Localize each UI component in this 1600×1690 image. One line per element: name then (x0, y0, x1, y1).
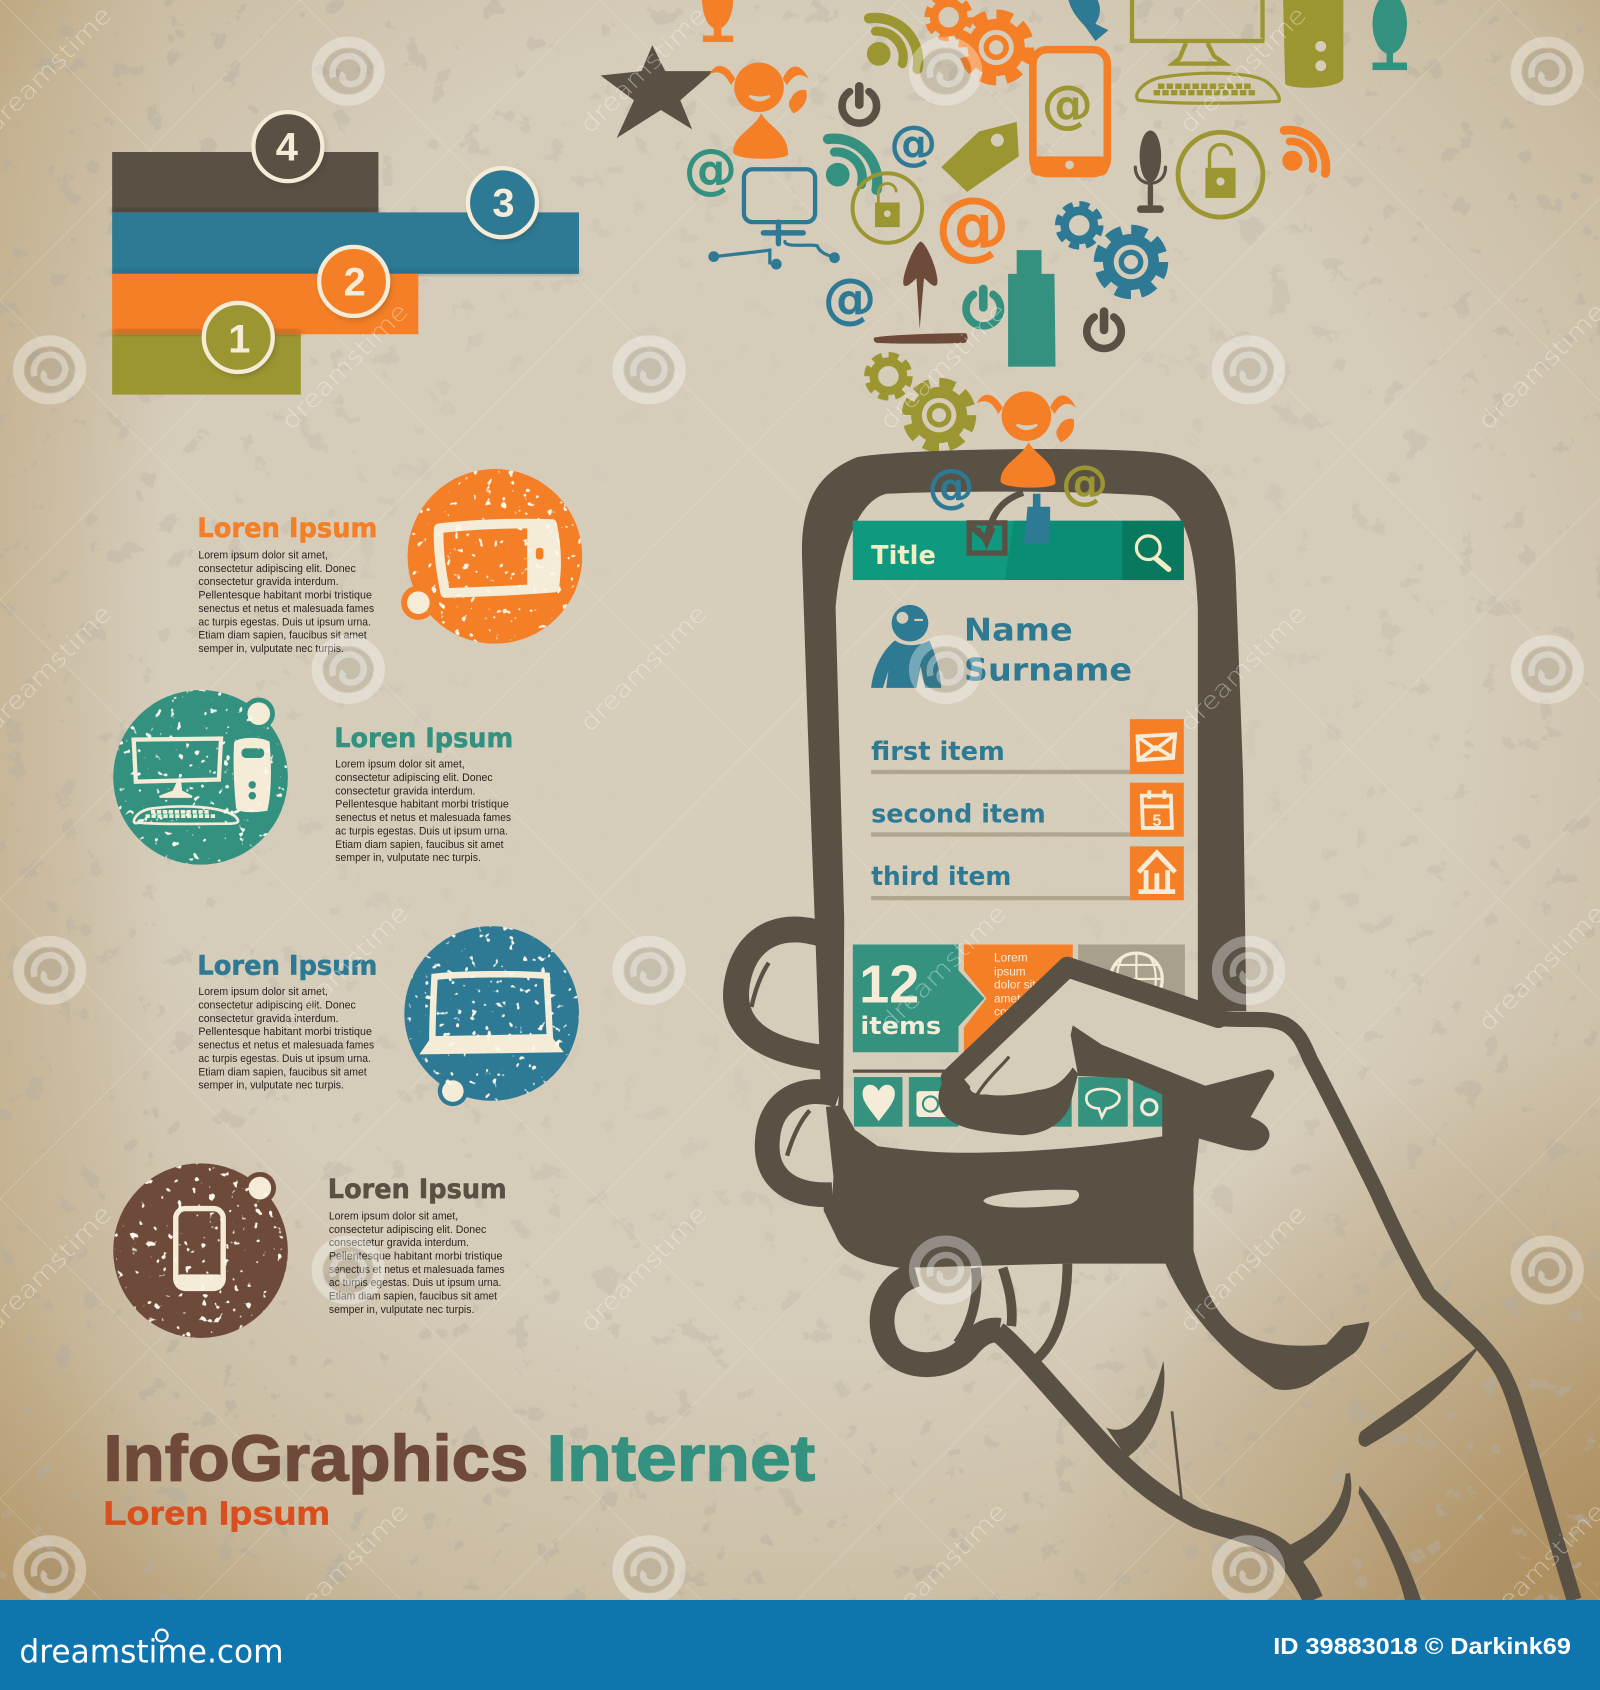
watermark text: dreamstime (574, 1, 712, 139)
thumb underside (938, 1067, 1078, 1135)
title: Internet (547, 1421, 815, 1494)
watermark text: dreamstime (574, 1200, 712, 1338)
icon: power teal (966, 289, 1001, 326)
body text: Lorem ipsum dolor sit amet, (198, 986, 328, 998)
watermark text: dreamstime (1174, 1, 1312, 139)
floating internet icons (601, 0, 1407, 446)
icon: girl bottom (977, 391, 1076, 488)
icon: desktop circle (110, 687, 291, 868)
hand palm cover (949, 958, 1283, 1121)
icon: at teal: @ (684, 138, 737, 201)
ring finger (882, 1274, 999, 1365)
watermark text: dreamstime (1473, 297, 1600, 435)
body text: Etiam diam sapien, faucibus sit amet (198, 630, 367, 642)
icon: laptop circle (401, 923, 582, 1106)
ribbon bar 2 (112, 274, 418, 334)
body text (329, 1210, 505, 1316)
badge 4 (253, 112, 325, 184)
phone bottom and palm mass (824, 1025, 1274, 1268)
icon: teal microphone (1372, 0, 1407, 70)
icon: microphone dark (1135, 130, 1165, 209)
title (104, 1421, 815, 1533)
badge 4: 4 (276, 126, 298, 170)
icon: at blue: @ (889, 116, 937, 172)
tile: 12 items (853, 944, 984, 1052)
icon: olive gears (868, 356, 970, 446)
tile: orange lorem: con (994, 1005, 1013, 1019)
wrist crease (1358, 1342, 1482, 1447)
badge 2: 2 (344, 260, 366, 304)
icon: rss orange (1282, 130, 1326, 174)
body text: semper in, vulputate nec turpis. (335, 852, 481, 864)
watermark text: dreamstime (276, 1497, 414, 1635)
badge 3: 3 (492, 182, 515, 226)
watermark text: dreamstime (276, 297, 414, 435)
icon: orange gears (928, 0, 1028, 79)
body text: ac turpis egestas. Duis ut ipsum urna. (335, 825, 508, 837)
third item row (871, 846, 1184, 900)
body text: Etiam diam sapien, faucibus sit amet (335, 839, 504, 851)
watermark text: dreamstime (276, 899, 414, 1037)
body text: Pellentesque habitant morbi tristique (198, 1026, 372, 1038)
heading: Loren Ipsum (197, 513, 377, 544)
tile: globe (1078, 944, 1185, 1009)
body text: Pellentesque habitant morbi tristique (329, 1250, 502, 1262)
body text: consectetur adipiscing elit. Donec (335, 772, 493, 784)
badge 1 (204, 303, 275, 375)
body text: consectetur gravida interdum. (335, 785, 475, 797)
palm lower edge (997, 1332, 1313, 1600)
body text: semper in, vulputate nec turpis. (198, 1080, 344, 1092)
profile icon (871, 605, 941, 688)
body text: senectus et netus et malesuada fames (335, 812, 511, 824)
body text: ac turpis egestas. Duis ut ipsum urna. (198, 1053, 371, 1065)
ribbon bar 3 (112, 212, 579, 274)
body text: consectetur adipiscing elit. Donec (198, 1000, 356, 1012)
phone in hand (736, 391, 1574, 1600)
body text (198, 549, 375, 655)
body text: senectus et netus et malesuada fames (198, 1040, 375, 1052)
heading: Loren Ipsum (197, 951, 377, 982)
panel: tablet item (197, 466, 585, 655)
body text (198, 986, 375, 1092)
icon: desktop computer olive (1132, 0, 1343, 103)
second item row: 5 (1152, 812, 1161, 830)
profile name: Name (964, 612, 1073, 648)
lower wrist curve (1358, 1486, 1421, 1600)
icon: smartphone circle (110, 1160, 291, 1341)
title: InfoGraphics (104, 1421, 528, 1494)
badge 3 (468, 168, 539, 240)
icon: star (601, 45, 714, 138)
body text: ac turpis egestas. Duis ut ipsum urna. (329, 1277, 501, 1289)
watermark text: dreamstime (1473, 899, 1600, 1037)
badge 1: 1 (228, 318, 250, 362)
profile name: Surname (964, 652, 1132, 688)
index finger (736, 929, 832, 1059)
watermark text: dreamstime (874, 1497, 1012, 1635)
thumb base crease (1165, 1251, 1369, 1390)
ring finger inner lines (957, 1264, 1067, 1358)
tile separator (853, 1070, 1183, 1073)
badge 2 (319, 247, 390, 319)
footer logo: dreamstime.com (19, 1633, 284, 1671)
body text: ac turpis egestas. Duis ut ipsum urna. (198, 616, 371, 628)
body text (335, 759, 511, 864)
icon: blue monitor network (711, 169, 838, 267)
body text: senectus et netus et malesuada fames (329, 1264, 505, 1276)
first item row (871, 719, 1184, 774)
tile: orange lorem: dolor sit (994, 978, 1036, 992)
heading: Loren Ipsum (328, 1174, 507, 1205)
icon: price tag (941, 122, 1019, 192)
palm crease hook (1106, 1361, 1164, 1458)
icon: usb drive teal (1008, 250, 1056, 367)
icon: orange phone with at sign (1031, 50, 1108, 176)
first item row: first item (871, 737, 1005, 767)
icon: blue gears (1059, 205, 1162, 293)
icon: lock circle right (1178, 132, 1263, 217)
heading: Loren Ipsum (334, 723, 513, 754)
body text: Etiam diam sapien, faucibus sit amet (329, 1291, 497, 1303)
icon: rss teal (826, 139, 877, 190)
panel: phone item (110, 1160, 507, 1341)
second item row: second item (871, 800, 1046, 830)
body text: Lorem ipsum dolor sit amet, (198, 549, 328, 561)
back of hand outline (1216, 1018, 1574, 1600)
profile name (964, 612, 1132, 688)
body text: consectetur adipiscing elit. Donec (198, 563, 356, 575)
icon: orange microphone (702, 0, 733, 42)
icon: power dark lower (1087, 312, 1121, 348)
palm thin line (1172, 1411, 1182, 1501)
thumb outline (951, 967, 1218, 1078)
tile: 12 items: 12 (859, 955, 919, 1015)
icon: lock circle left (853, 173, 922, 243)
phone top overlays: @ (1061, 456, 1108, 511)
body text: consectetur gravida interdum. (329, 1237, 469, 1249)
icon: at orange: @ (935, 181, 1010, 269)
app header: Title (871, 541, 936, 571)
watermark text: dreamstime (1174, 1200, 1312, 1338)
body text: Lorem ipsum dolor sit amet, (329, 1210, 458, 1222)
watermark text: dreamstime (874, 899, 1012, 1037)
tile: 12 items: items (860, 1012, 941, 1040)
body text: consectetur gravida interdum. (198, 576, 339, 588)
ribbon bar 4 (112, 152, 378, 212)
icon: power dark (842, 86, 877, 123)
tile: orange lorem (964, 944, 1073, 1052)
body text: consectetur adipiscing elit. Donec (329, 1224, 487, 1236)
phone screen (853, 521, 1185, 1127)
panel: laptop item (197, 923, 582, 1106)
third item row: third item (871, 862, 1011, 892)
tile: orange lorem: ipsum (994, 965, 1026, 979)
thumb nail line (975, 1057, 1009, 1099)
body text: semper in, vulputate nec turpis. (198, 643, 344, 655)
icon: upload arrow (874, 242, 968, 344)
icon: girl top (709, 63, 809, 159)
ribbon bar 1 (112, 334, 301, 395)
phone speaker slot (983, 1190, 1079, 1208)
body text: Etiam diam sapien, faucibus sit amet (198, 1066, 367, 1078)
panel: desktop item (110, 687, 513, 868)
body text: Pellentesque habitant morbi tristique (198, 590, 372, 602)
app header (853, 521, 1184, 580)
second item row (871, 783, 1184, 837)
icon: blue microphone (1068, 0, 1108, 41)
lower wrist hook (1285, 1473, 1351, 1570)
phone top overlays (927, 391, 1108, 553)
watermark text: dreamstime (574, 599, 712, 737)
footer bar (0, 1600, 1600, 1690)
icon: orange phone with at sign: @ (1042, 75, 1093, 135)
title: Loren Ipsum (104, 1496, 330, 1533)
body text: Lorem ipsum dolor sit amet, (335, 759, 465, 771)
icon: at blue lower: @ (823, 267, 877, 330)
ribbon steps chart (112, 112, 579, 395)
icon: rss olive (867, 18, 918, 69)
bottom icon row (854, 1077, 1182, 1127)
watermark text: dreamstime (1473, 1497, 1600, 1635)
watermark text: dreamstime (874, 297, 1012, 435)
body text: senectus et netus et malesuada fames (198, 603, 375, 615)
middle finger (767, 1092, 841, 1195)
watermark text: dreamstime (1174, 599, 1312, 737)
icon: tablet circle (401, 466, 585, 647)
phone body (802, 449, 1246, 1208)
tile: orange lorem: Lorem (994, 951, 1028, 965)
footer credit: ID 39883018 © Darkink69 (1273, 1633, 1571, 1659)
tile: orange lorem: amet, (994, 992, 1024, 1006)
body text: semper in, vulputate nec turpis. (329, 1304, 474, 1316)
phone top overlays: @ (927, 459, 975, 514)
body text: Pellentesque habitant morbi tristique (335, 799, 509, 811)
body text: consectetur gravida interdum. (198, 1013, 339, 1025)
